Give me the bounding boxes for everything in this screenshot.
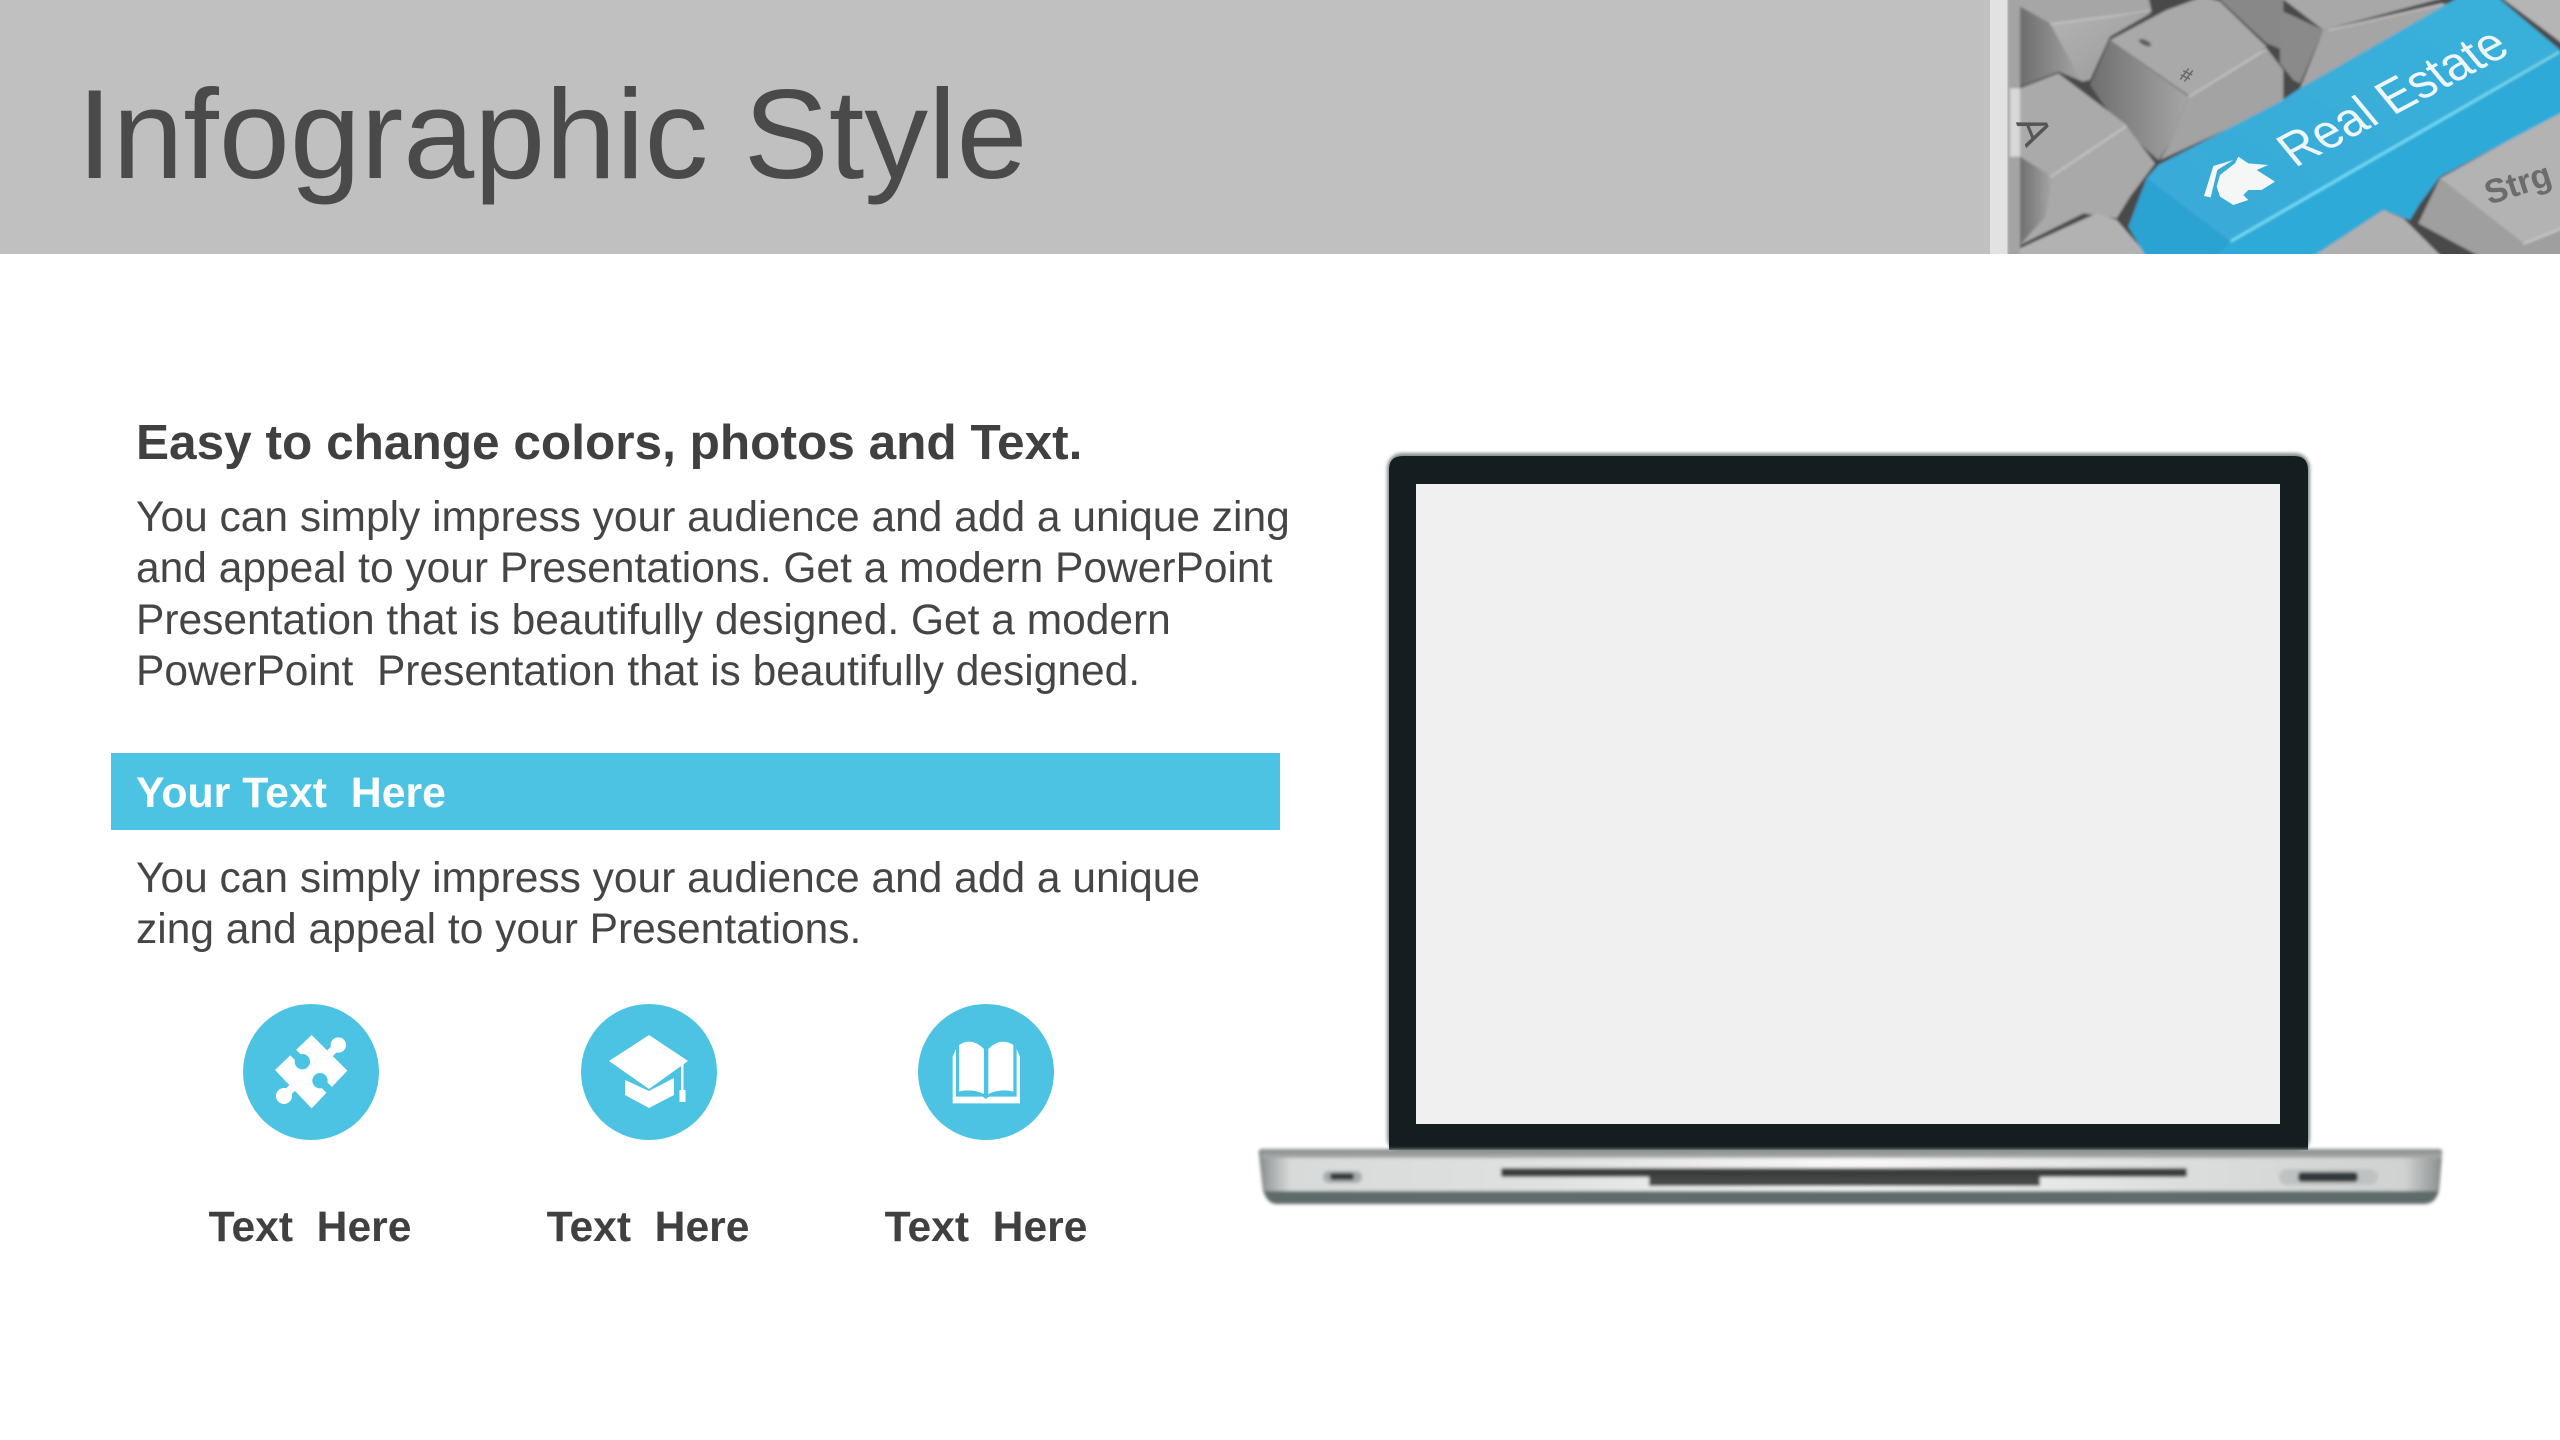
- icon: puzzle piece: [243, 1004, 379, 1140]
- laptop base: [1259, 1149, 2442, 1204]
- photo key lettering: A: [2007, 108, 2061, 152]
- header band: [0, 0, 2560, 254]
- icon: open book: [918, 1004, 1054, 1140]
- blue heading bar: [111, 753, 1280, 830]
- photo: real estate keyboard: [1990, 0, 2560, 254]
- photo key lettering: Strg: [2480, 155, 2556, 213]
- photo key lettering: #: [2176, 63, 2196, 88]
- icon: graduation cap: [581, 1004, 717, 1140]
- title: Infographic Style: [77, 63, 1027, 206]
- photo key lettering: Real Estate: [2265, 16, 2520, 177]
- label: text here 3: Text Here: [885, 1203, 1087, 1251]
- photo key lettering: [2007, 16, 2556, 213]
- subheading: Easy to change colors, photos and Text.: [136, 414, 1082, 470]
- body paragraph: You can simply impress your audience and add a unique zing and appeal to your Presentations. Get a modern PowerPoint Presentation that is beautifully designed. Get a modern PowerPoint Presentation that is beautifully designed.: [136, 494, 1290, 695]
- label: text here 1: Text Here: [209, 1203, 411, 1251]
- secondary paragraph: You can simply impress your audience and add a unique zing and appeal to your Presentations.: [136, 855, 1200, 953]
- house icon on key: [2204, 157, 2275, 205]
- laptop: [1256, 450, 2444, 1206]
- bar label: Your Text Here: [136, 769, 446, 817]
- label: text here 2: Text Here: [547, 1203, 749, 1251]
- laptop screen: [1416, 484, 2280, 1124]
